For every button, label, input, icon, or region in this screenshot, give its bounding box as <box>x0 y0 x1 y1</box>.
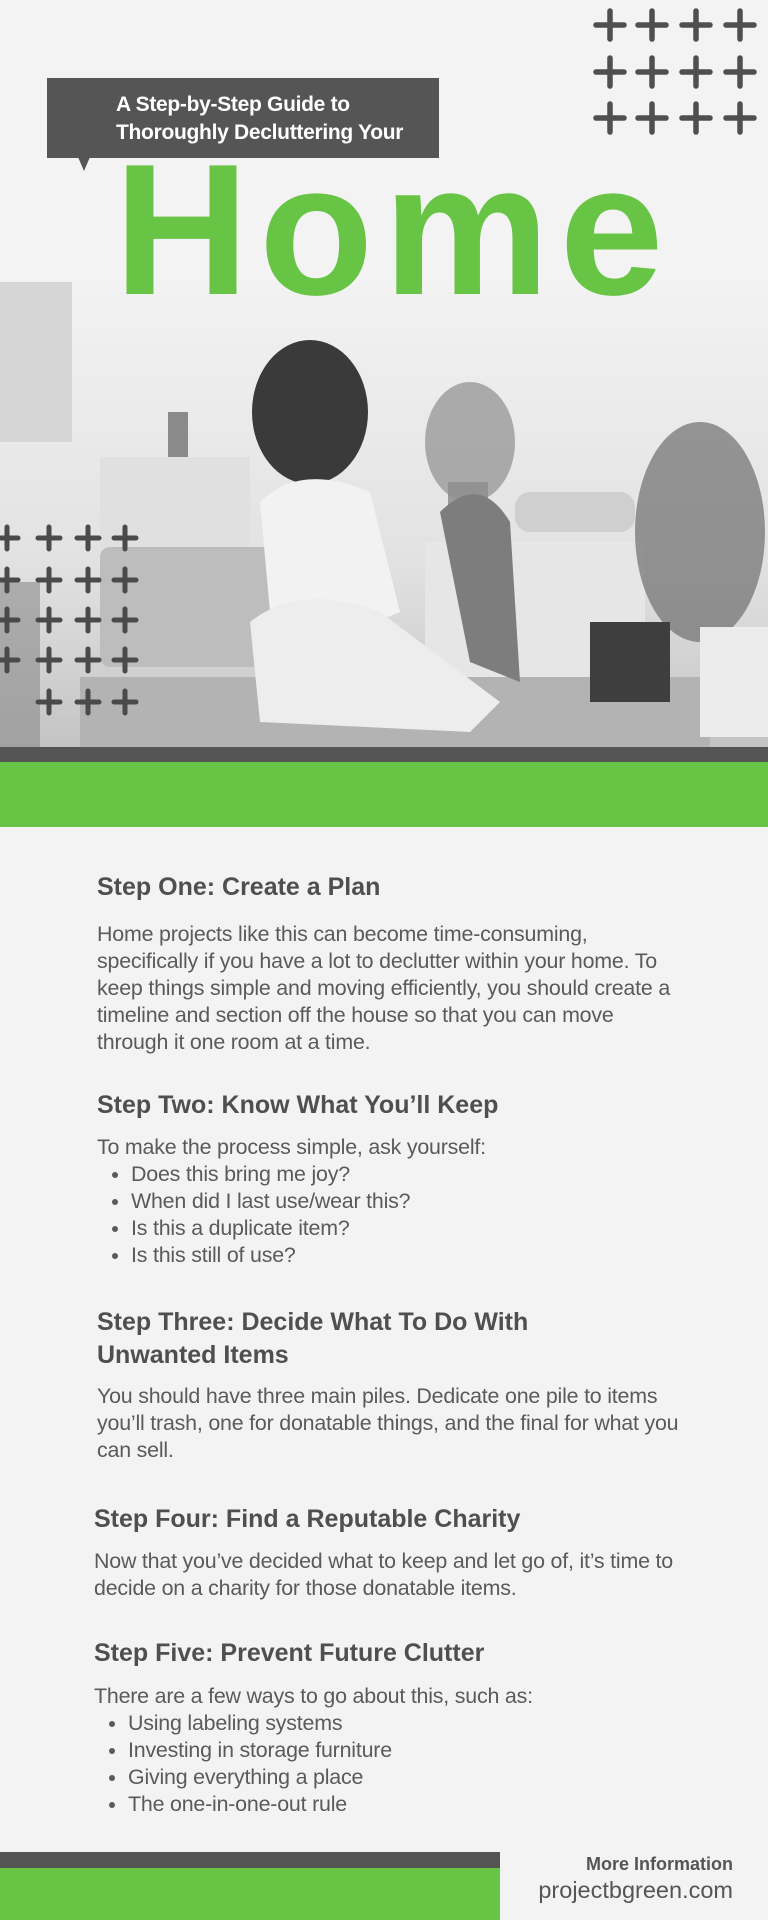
step three heading <box>97 1308 528 1369</box>
step two body: Does this bring me joy? <box>131 1162 350 1186</box>
step four heading: Step Four: Find a Reputable Charity <box>94 1505 520 1533</box>
step five body: Investing in storage furniture <box>128 1738 392 1762</box>
step two body: When did I last use/wear this? <box>131 1189 410 1213</box>
footer green bar <box>0 1868 500 1920</box>
callout pointer <box>78 157 90 171</box>
step five body: Giving everything a place <box>128 1765 363 1789</box>
step two body: Is this a duplicate item? <box>131 1216 350 1240</box>
icon: plus grid top right <box>593 8 757 135</box>
step one body <box>97 922 670 1054</box>
step two body: Is this still of use? <box>131 1243 296 1267</box>
step five body <box>94 1684 533 1816</box>
step three heading: Step Three: Decide What To Do With <box>97 1308 528 1336</box>
step two heading: Step Two: Know What You’ll Keep <box>97 1091 498 1119</box>
icon: plus grid on photo <box>0 524 138 716</box>
label: More Information <box>586 1854 733 1874</box>
step one body: keep things simple and moving efficiently, you should create a <box>97 976 670 1000</box>
subtitle text: A Step-by-Step Guide to <box>116 93 350 116</box>
step one body: timeline and section off the house so that you can move <box>97 1003 614 1027</box>
step three body: You should have three main piles. Dedicate one pile to items <box>97 1384 657 1408</box>
step two body: To make the process simple, ask yourself: <box>97 1135 486 1159</box>
step four body: decide on a charity for those donatable items. <box>94 1576 516 1600</box>
step one body: specifically if you have a lot to declutter within your home. To <box>97 949 657 973</box>
step three body: you’ll trash, one for donatable things, and the final for what you <box>97 1411 678 1435</box>
step one heading: Step One: Create a Plan <box>97 873 380 901</box>
step five body: Using labeling systems <box>128 1711 342 1735</box>
footer: more information <box>538 1854 733 1903</box>
footer dark bar <box>0 1852 500 1868</box>
website: projectbgreen.com <box>538 1877 733 1903</box>
step three body: can sell. <box>97 1438 174 1462</box>
step four body: Now that you’ve decided what to keep and let go of, it’s time to <box>94 1549 673 1573</box>
step one body: Home projects like this can become time-consuming, <box>97 922 588 946</box>
step five body: The one-in-one-out rule <box>128 1792 347 1816</box>
subtitle text <box>116 93 404 144</box>
step three heading: Unwanted Items <box>97 1341 289 1369</box>
photo: woman decluttering <box>0 282 768 747</box>
step three body <box>97 1384 678 1462</box>
title box <box>47 78 439 158</box>
main heading: Home: Home <box>114 125 674 334</box>
step one body: through it one room at a time. <box>97 1030 370 1054</box>
subtitle text: Thoroughly Decluttering Your <box>116 121 403 144</box>
green band <box>0 762 768 827</box>
step two body <box>97 1135 486 1267</box>
step five body: There are a few ways to go about this, such as: <box>94 1684 533 1708</box>
step five heading: Step Five: Prevent Future Clutter <box>94 1639 484 1667</box>
dark band <box>0 747 768 762</box>
step four body <box>94 1549 673 1600</box>
